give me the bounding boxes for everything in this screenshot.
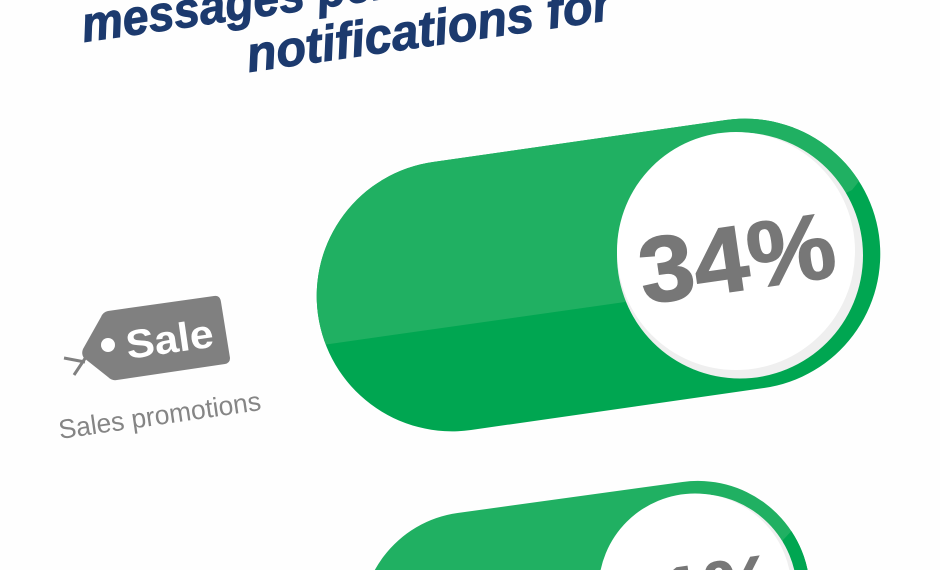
title [78,0,617,83]
icon: sale tag [64,296,230,380]
icon: sale tag: Sale [123,312,216,368]
knob [617,132,855,370]
pill: second category [374,480,808,570]
knob [598,494,792,570]
pill body [361,481,810,570]
knob shadow [705,494,794,570]
pill highlight [316,118,859,344]
knob shadow [617,132,863,378]
label: sales promotions: Sales promotions [57,386,263,445]
pill body [317,119,880,431]
pill shade [783,531,808,570]
pill: sales promotions 34% [316,118,880,432]
value: 34%: 34% [632,193,842,324]
